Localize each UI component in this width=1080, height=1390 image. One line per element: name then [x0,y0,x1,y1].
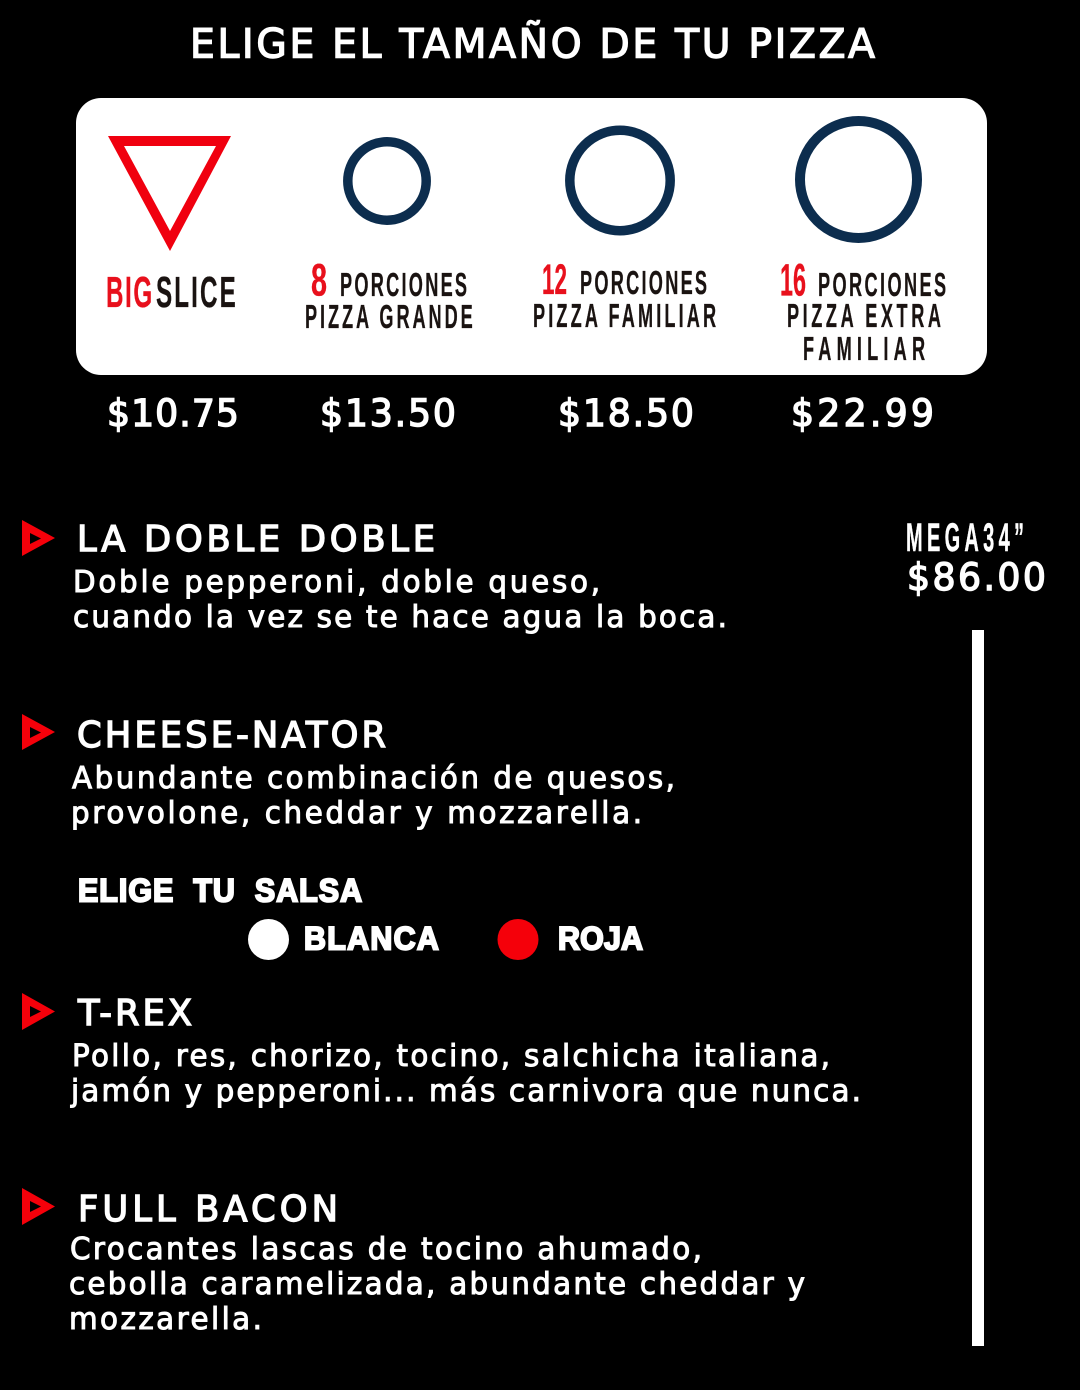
panel: pizza sizes [76,98,987,375]
item: cheese-nator: provolone, cheddar y mozzarella. [71,796,642,831]
icon: big slice triangle [108,136,231,251]
item: full bacon: mozzarella. [69,1302,262,1337]
item: full bacon: cebolla caramelizada, abundante cheddar y [69,1267,805,1302]
prices row: $13.50 [320,392,456,435]
item: full bacon: FULL BACON [78,1189,338,1230]
title: ELIGE EL TAMAÑO DE TU PIZZA [190,20,875,68]
sauce: blanca: BLANCA [304,921,439,957]
icon: 16 slice pizza circle [800,121,917,238]
label: 16 porciones pizza extra familiar [780,254,946,367]
label: 12 porciones pizza familiar [533,256,716,334]
label: 16 porciones pizza extra familiar: PORCIONES [818,266,946,303]
icon: 12 slice pizza circle [570,130,670,231]
icon: 8 slice pizza circle [348,142,426,220]
item: t-rex: T-REX [77,993,192,1034]
item: la doble doble [22,519,727,635]
label: big slice: SLICE [156,267,236,317]
sauce: roja: ROJA [558,921,643,957]
item: t-rex [22,993,861,1109]
mega 34 size and price: $86.00 [907,556,1046,599]
label: 8 porciones pizza grande: PIZZA GRANDE [305,298,473,335]
label: 16 porciones pizza extra familiar: 16 [780,254,806,306]
label: 16 porciones pizza extra familiar: PIZZA EXTRA [787,297,941,334]
heading: elige tu salsa: ELIGE TU SALSA [78,873,362,909]
label: 12 porciones pizza familiar: PORCIONES [580,264,707,301]
item: la doble doble: cuando la vez se te hace agua la boca. [73,600,727,635]
prices row [107,392,934,435]
prices row: $22.99 [791,392,934,435]
label: 12 porciones pizza familiar: 12 [542,256,567,304]
item: t-rex: jamón y pepperoni... más carnivora que nunca. [70,1074,861,1109]
item: cheese-nator [22,714,675,831]
mega 34 size and price: MEGA34” [906,514,1024,560]
item: cheese-nator: CHEESE-NATOR [77,715,386,756]
sauce chooser [78,873,643,960]
sauce: roja [498,919,643,960]
item: full bacon [22,1188,805,1337]
prices row: $10.75 [107,392,239,435]
label: big slice: BIG [106,267,152,317]
prices row: $18.50 [558,392,694,435]
label: 16 porciones pizza extra familiar: FAMILIAR [803,330,925,367]
mega 34 size and price [906,514,1046,599]
label: 8 porciones pizza grande [305,254,473,335]
item: la doble doble: LA DOBLE DOBLE [77,519,435,560]
label: 8 porciones pizza grande: PORCIONES [340,266,467,303]
vertical bar [972,630,984,1346]
item: t-rex: Pollo, res, chorizo, tocino, salchicha italiana, [72,1039,830,1074]
item: full bacon: Crocantes lascas de tocino ahumado, [70,1232,702,1267]
sauce: blanca [248,919,439,960]
label: 8 porciones pizza grande: 8 [311,254,327,306]
item: cheese-nator: Abundante combinación de quesos, [72,761,675,796]
label: big slice [106,267,236,317]
item: la doble doble: Doble pepperoni, doble queso, [73,565,600,600]
label: 12 porciones pizza familiar: PIZZA FAMILIAR [533,297,716,334]
